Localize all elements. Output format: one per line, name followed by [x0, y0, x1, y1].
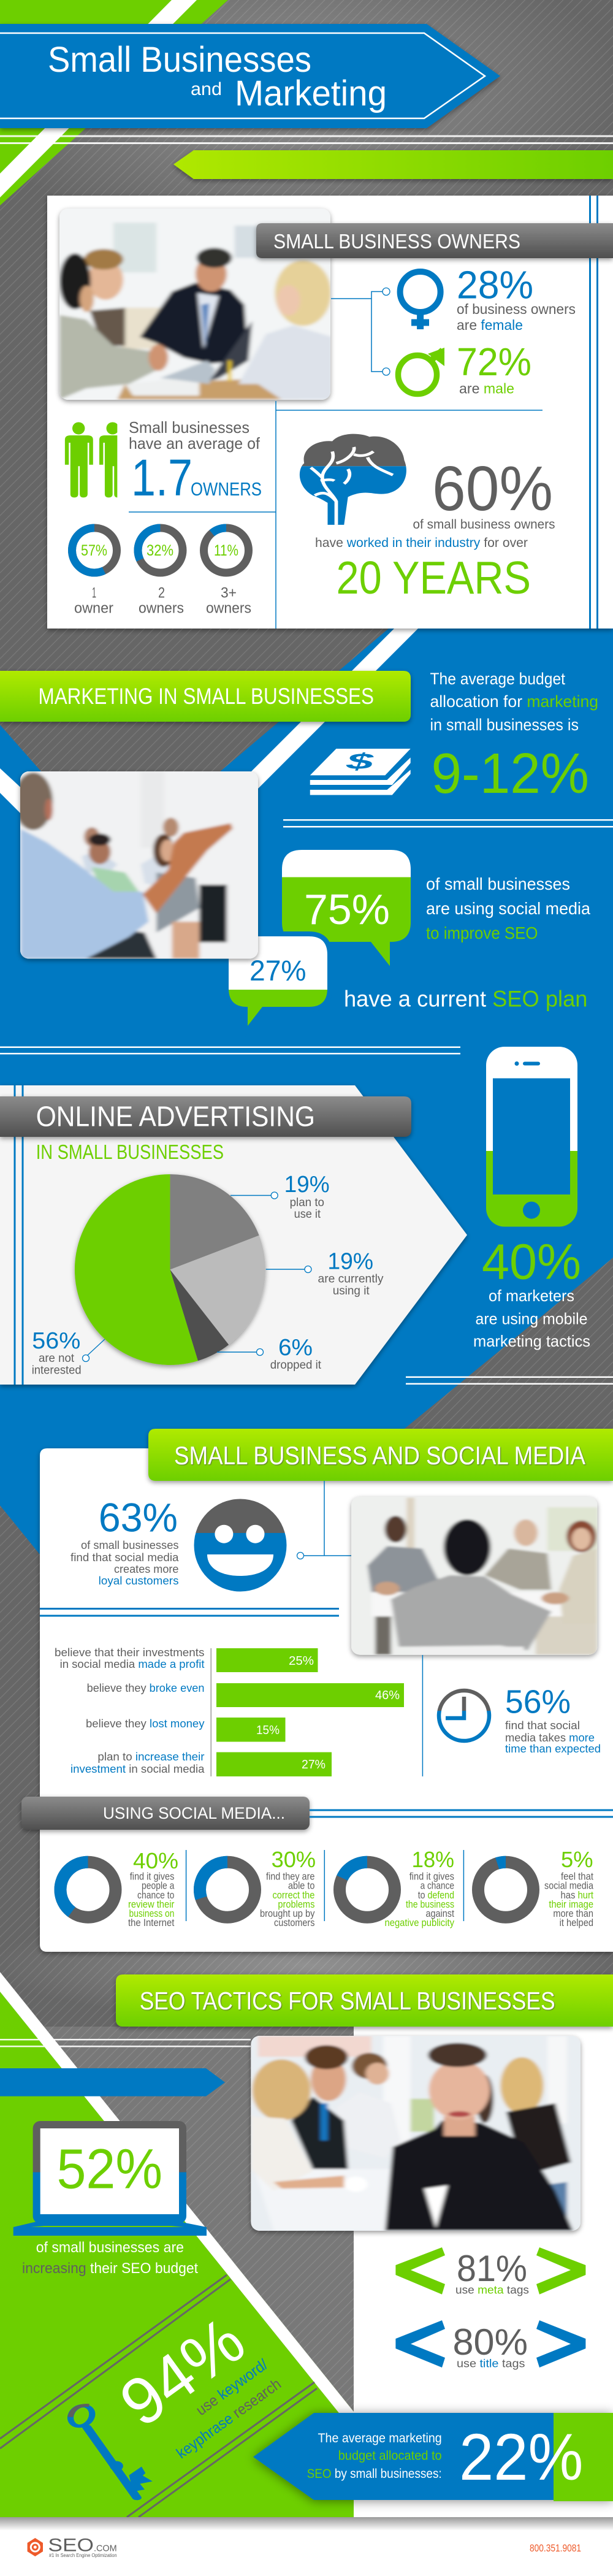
- stat: 63% loyal customers: 63%: [99, 1495, 178, 1540]
- text: social media to improve SEO: are using social media: [426, 899, 590, 918]
- text: SEO budget: increasing their SEO budget: [22, 2260, 198, 2277]
- panel: small business and social media: [21, 1429, 613, 1952]
- stat: 5% hurt image: more than: [553, 1908, 593, 1919]
- phone number: 800.351.9081: [530, 2542, 581, 2554]
- stat: 56% more time: find that social: [505, 1719, 580, 1732]
- label: 19% currently using it: [266, 1249, 384, 1298]
- stat: 18% defend business: negative publicity: [385, 1917, 455, 1928]
- label: 19% plan to use it: plan to: [290, 1196, 324, 1209]
- label: 19% plan to use it: 19%: [284, 1172, 330, 1198]
- stat: 1.7 owners: have an average of: [129, 434, 261, 453]
- text: social media to improve SEO: of small businesses: [426, 874, 570, 893]
- heading: small business owners: [256, 223, 613, 258]
- stat: 30% correct problems: brought up by: [260, 1908, 315, 1919]
- donut: 32% two owners: owners: [139, 600, 184, 617]
- stat: 5% hurt image: it helped: [560, 1917, 593, 1928]
- label: 56% not interested: interested: [32, 1364, 82, 1377]
- stat: 60% 20 years: 60%: [432, 453, 553, 524]
- stat: 40% review business: chance to: [137, 1890, 174, 1901]
- stat: 60% 20 years: of small business owners: [413, 518, 555, 532]
- stat: 56% more time: [505, 1684, 601, 1755]
- callout: 22% budget allocated to SEO: 22%: [459, 2420, 584, 2494]
- photo: business handshake: [55, 205, 337, 405]
- label: 19% plan to use it: [230, 1172, 330, 1221]
- stat: 28% female: of business owners: [457, 301, 576, 317]
- logo: SEO.com: SEO: [48, 2536, 94, 2556]
- speech bubble: 75%: 75%: [304, 885, 390, 933]
- text: SEO budget: of small businesses are: [36, 2239, 184, 2256]
- stat: 40% review business: find it gives: [130, 1871, 174, 1882]
- stat: 56% more time: media takes more: [505, 1731, 595, 1744]
- stat: 5% hurt image: 5%: [561, 1847, 593, 1872]
- icon: stack of money: [310, 749, 411, 795]
- background: bottom green wedge: [0, 1972, 613, 2517]
- panel: small business owners: [47, 196, 613, 629]
- stat: 18% defend business: against: [425, 1908, 454, 1919]
- heading: SEO tactics: [116, 1974, 613, 2027]
- heading: SEO tactics: SEO TACTICS FOR SMALL BUSINESSES: [140, 1987, 555, 2015]
- stat: 40% review business: 40%: [133, 1848, 178, 1873]
- bar chart: 27%: [302, 1758, 326, 1771]
- white double rules at top: [0, 135, 613, 144]
- icon: two people: [65, 422, 118, 498]
- icon: key: [68, 2405, 153, 2498]
- heading: marketing in small businesses: [0, 671, 411, 722]
- stat: 1.7 owners: 1.7: [131, 449, 192, 506]
- icon: stack of money: $: [345, 749, 375, 774]
- donut: 32% two owners: 32%: [147, 542, 173, 559]
- bar chart: [55, 1646, 404, 1776]
- icon: laptop with 52%: [13, 2121, 207, 2236]
- label: 6% dropped it: 6%: [278, 1335, 313, 1361]
- connector lines: [331, 288, 390, 375]
- callout: 22% budget allocated to SEO: SEO by small businesses:: [307, 2467, 442, 2481]
- donut: 57% one owner: [72, 528, 116, 617]
- text: budget allocation: [430, 670, 598, 734]
- heading: small business and social media: [148, 1429, 613, 1481]
- text: social media to improve SEO: to improve SEO: [426, 923, 538, 942]
- label: 56% not interested: are not: [39, 1351, 75, 1365]
- donut: 57% one owner: owner: [74, 600, 113, 617]
- speech bubble: 27%: 27%: [249, 954, 306, 987]
- donut: 32% two owners: [138, 528, 184, 617]
- panel: SEO tactics: [0, 1974, 613, 2501]
- text: current SEO plan: have a current SEO plan: [344, 987, 587, 1012]
- heading: online advertising: [0, 1096, 411, 1137]
- title text: Small Businesses: [48, 40, 311, 80]
- label: 19% plan to use it: use it: [294, 1207, 321, 1221]
- stat: 9-12%: 9-12%: [432, 741, 589, 805]
- text: SEO budget: [22, 2239, 198, 2277]
- bar labels: investment in social media: [70, 1762, 205, 1775]
- stat: 5% hurt image: has hurt: [560, 1890, 593, 1901]
- text: budget allocation: in small businesses is: [430, 716, 579, 734]
- heading: online advertising: ONLINE ADVERTISING: [36, 1100, 315, 1132]
- stat: 40% review business: business on: [129, 1908, 174, 1919]
- stat: 18% defend business: 18%: [412, 1847, 454, 1872]
- label: 19% currently using it: are currently: [318, 1272, 384, 1285]
- title text: [48, 40, 387, 113]
- stat: 1.7 owners: [129, 418, 262, 506]
- heading: marketing in small businesses: MARKETING IN SMALL BUSINESSES: [38, 684, 374, 709]
- donut: 57% one owner: 1: [92, 585, 96, 601]
- callout: 22% budget allocated to SEO: The average marketing: [318, 2431, 442, 2445]
- text: social media to improve SEO: [426, 874, 590, 942]
- stat: 40% review business: people a: [142, 1881, 175, 1892]
- stat: 1.7 owners: OWNERS: [191, 478, 262, 500]
- stat: 1.7 owners: Small businesses: [129, 418, 249, 437]
- stat: 28% female: [457, 262, 576, 333]
- subheading: in small businesses: IN SMALL BUSINESSES: [36, 1141, 224, 1163]
- bar labels: believe they lost money: [86, 1717, 205, 1730]
- heading: small business owners: SMALL BUSINESS OWNERS: [273, 230, 520, 253]
- stat: 30% correct problems: [200, 1847, 316, 1928]
- stat: 18% defend business: to defend: [418, 1890, 454, 1901]
- stat: 40% mobile marketing: marketing tactics: [473, 1332, 590, 1350]
- icon: female symbol: [400, 272, 441, 329]
- stat: 63% loyal customers: loyal customers: [99, 1574, 179, 1587]
- stat: 40% review business: review their: [128, 1899, 175, 1910]
- stat: 30% correct problems: customers: [274, 1917, 314, 1928]
- stat: 81% meta tags: [395, 2247, 585, 2296]
- photo: interview meeting: [344, 1492, 602, 1657]
- stat: 40% review business: [60, 1848, 178, 1928]
- donut: 11% three plus owners: 11%: [214, 542, 238, 559]
- stat: 28% female: are female: [457, 317, 523, 333]
- icon: smiley face: [194, 1499, 287, 1592]
- label: 56% not interested: [32, 1328, 105, 1377]
- stat: 40% review business: the Internet: [128, 1917, 175, 1928]
- label: 6% dropped it: [217, 1335, 322, 1372]
- icon: male symbol: [398, 348, 444, 394]
- bar labels: believe they broke even: [87, 1681, 205, 1694]
- bar chart: 25%: [289, 1654, 314, 1668]
- heading: using social media: USING SOCIAL MEDIA...: [103, 1804, 285, 1822]
- background: top green wedge with white band: [0, 0, 228, 205]
- label: 6% dropped it: dropped it: [270, 1358, 322, 1372]
- donut: 11% three plus owners: [204, 528, 251, 617]
- connector from heading to photo: [297, 1481, 351, 1559]
- icon: brain: [300, 434, 406, 525]
- bar labels: [55, 1646, 205, 1775]
- stat: 5% hurt image: [478, 1847, 594, 1928]
- stat: 80% title tags: 80%: [452, 2322, 528, 2363]
- stat: 72% male: 72%: [457, 340, 531, 384]
- stat: 81% meta tags: 81%: [457, 2248, 527, 2289]
- stat: 30% correct problems: find they are: [266, 1871, 314, 1882]
- icon: laptop with 52%: 52%: [56, 2138, 162, 2201]
- stat: 28% female: 28%: [457, 262, 533, 307]
- stat: 40% mobile marketing: 40%: [482, 1234, 581, 1290]
- background: blue section: [0, 629, 613, 1554]
- stat: 40% mobile marketing: are using mobile: [476, 1310, 587, 1328]
- blue arrow ribbon: [0, 2068, 225, 2096]
- logo: SEO.com: [28, 2536, 117, 2558]
- stat: 94% keyword research: use keyword/: [193, 2356, 271, 2419]
- bar chart: 15%: [256, 1724, 280, 1737]
- stat: 5% hurt image: their image: [549, 1899, 593, 1910]
- stat: 60% 20 years: have worked in their industry for over: [315, 536, 528, 550]
- stat: 72% male: are male: [459, 380, 514, 396]
- stat: 30% correct problems: correct the: [272, 1890, 314, 1901]
- bar labels: believe that their investments: [55, 1646, 205, 1659]
- title text: Marketing: [235, 74, 387, 113]
- stat: 80% title tags: use title tags: [457, 2358, 525, 2370]
- green arrow ribbon: [173, 150, 613, 179]
- donut: 11% three plus owners: 3+: [221, 585, 237, 601]
- speech bubble: 27%: [229, 936, 327, 1026]
- bar labels: plan to increase their: [97, 1750, 205, 1763]
- stat: 30% correct problems: problems: [278, 1899, 314, 1910]
- stat: 30% correct problems: able to: [288, 1881, 314, 1892]
- donut: 11% three plus owners: owners: [206, 600, 251, 617]
- photo: presenter and audience: [12, 766, 266, 963]
- stat: 63% loyal customers: find that social media: [70, 1551, 179, 1564]
- text: budget allocation: allocation for marketing: [430, 692, 598, 711]
- stat: 60% 20 years: [315, 453, 555, 603]
- stat: 80% title tags: [395, 2320, 585, 2370]
- stat: 5% hurt image: social media: [544, 1881, 594, 1892]
- photo: team at table: [246, 2033, 587, 2233]
- stat: 94% keyword research: 94%: [107, 2303, 257, 2440]
- label: 19% currently using it: 19%: [327, 1249, 373, 1275]
- stat: 18% defend business: the business: [406, 1899, 454, 1910]
- pie chart: [75, 1174, 265, 1365]
- panel: marketing in small businesses: [0, 670, 613, 1055]
- stat: 18% defend business: a chance: [421, 1881, 454, 1892]
- stat: 94% keyword research: keyphrase research: [173, 2375, 284, 2462]
- label: 56% not interested: 56%: [32, 1328, 80, 1354]
- stat: 18% defend business: [340, 1847, 455, 1928]
- speech bubble: 75%: [282, 850, 411, 966]
- donut: 32% two owners: 2: [158, 585, 165, 601]
- icon: smartphone: [486, 1047, 577, 1226]
- stat: 63% loyal customers: [70, 1495, 179, 1587]
- title banner: [0, 24, 500, 128]
- stat: 30% correct problems: 30%: [272, 1847, 316, 1872]
- logo: SEO.com: #1 In Search Engine Optimization: [49, 2553, 117, 2558]
- text: budget allocation: The average budget: [430, 670, 565, 688]
- donut: 57% one owner: 57%: [81, 542, 107, 559]
- stat: 40% mobile marketing: of marketers: [489, 1286, 574, 1305]
- label: 19% currently using it: using it: [333, 1284, 370, 1298]
- bar chart: 46%: [375, 1689, 400, 1702]
- stat: 40% mobile marketing: [473, 1234, 590, 1350]
- heading: using social media: [21, 1797, 310, 1830]
- stat: 63% loyal customers: creates more: [114, 1562, 179, 1575]
- title text: and: [191, 79, 222, 99]
- panel: online advertising: [0, 1085, 467, 1385]
- stat: 56% more time: 56%: [505, 1684, 571, 1721]
- callout: 22% budget allocated to SEO: [253, 2413, 613, 2501]
- stat: 81% meta tags: use meta tags: [455, 2284, 529, 2296]
- stat: 56% more time: time than expected: [505, 1742, 601, 1755]
- footer: [0, 2517, 613, 2576]
- stat: 63% loyal customers: of small businesses: [81, 1538, 179, 1551]
- callout: 22% budget allocated to SEO: budget allocated to: [338, 2449, 442, 2463]
- icon: clock: [439, 1691, 489, 1741]
- bar labels: in social media made a profit: [60, 1657, 204, 1670]
- stat: 18% defend business: find it gives: [409, 1871, 454, 1882]
- stat: 5% hurt image: feel that: [561, 1871, 593, 1882]
- stat: 60% 20 years: 20 YEARS: [336, 552, 531, 603]
- logo: SEO.com: .COM: [94, 2544, 117, 2554]
